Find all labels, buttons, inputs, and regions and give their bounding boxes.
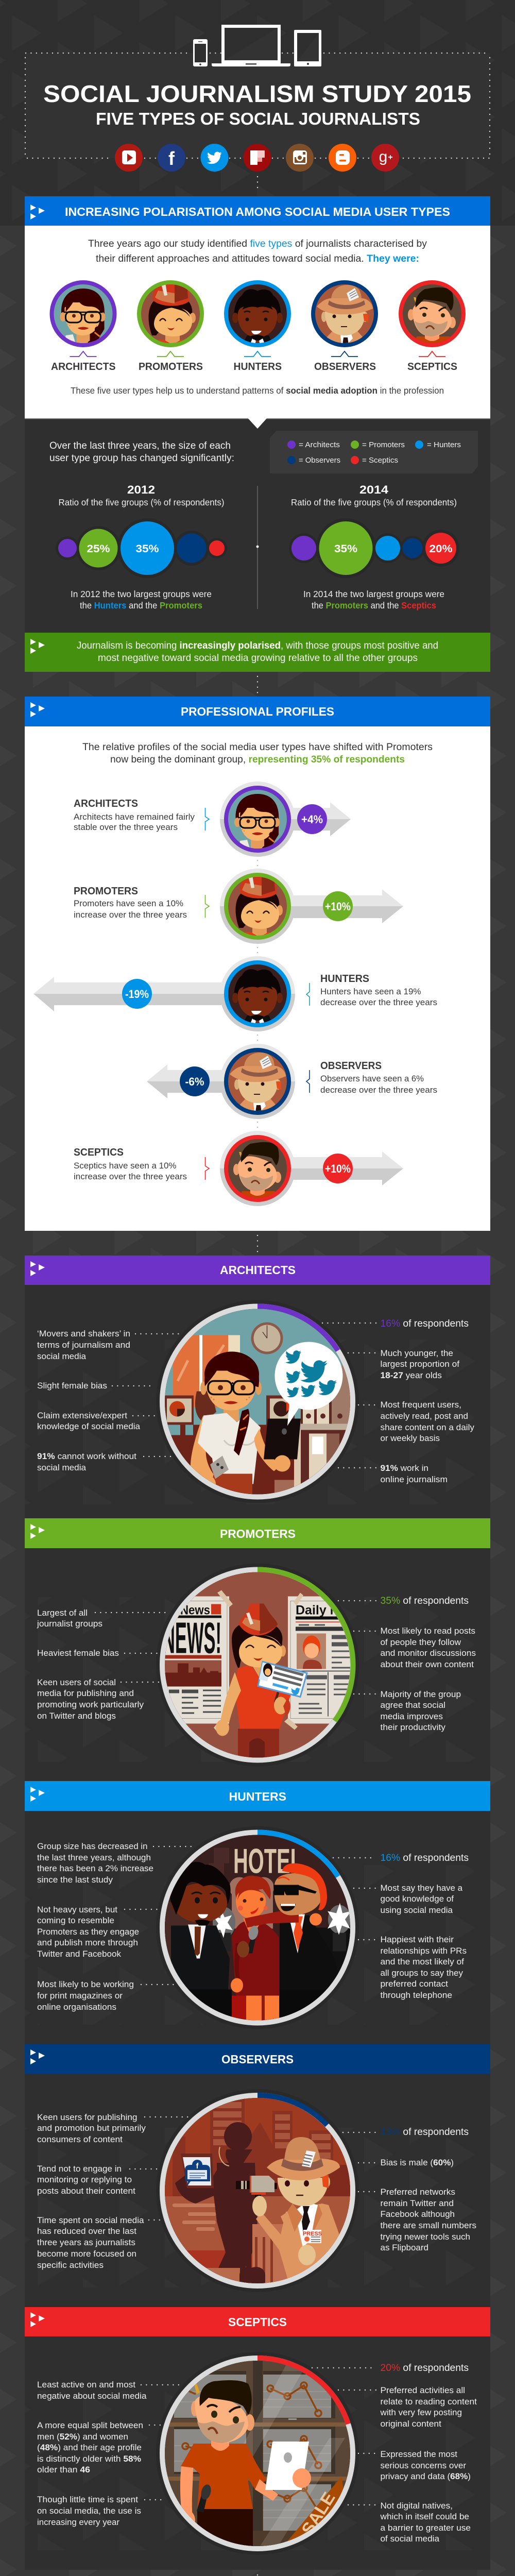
- portrait: sceptics: SCEPTICS: [407, 361, 457, 372]
- panel: five types: [25, 226, 490, 418]
- chart: 2014: 2014: [359, 483, 389, 496]
- profile: sceptics: increase over the three years: [74, 1172, 187, 1181]
- intro text: their different approaches and attitudes toward social media. They were:: [96, 253, 419, 264]
- profile: observers: decrease over the three years: [320, 1086, 437, 1095]
- right notes: [343, 2127, 476, 2252]
- left notes: Not heavy users, but: [37, 1905, 117, 1914]
- banner: ARCHITECTS: [220, 1263, 296, 1277]
- left notes: Promoters as they engage: [37, 1927, 139, 1937]
- header frame: [25, 53, 490, 158]
- right notes: Most likely to read posts: [380, 1626, 475, 1636]
- left notes: on social media, the use is: [37, 2506, 141, 2516]
- section: architects: [25, 1256, 490, 1503]
- profile: promoters: +10%: [325, 900, 351, 913]
- left notes: negative about social media: [37, 2392, 147, 2401]
- profile: promoters: Promoters have seen a 10%: [74, 899, 183, 908]
- left notes: ‘Movers and shakers’ in: [37, 1329, 130, 1338]
- left notes: Twitter and Facebook: [37, 1950, 122, 1959]
- portrait: observers: [311, 280, 378, 372]
- text: over three years: [49, 440, 234, 464]
- left notes: for print magazines or: [37, 1991, 123, 2001]
- left notes: the last three years, although: [37, 1853, 151, 1862]
- right notes: trying newer tools such: [380, 2232, 470, 2242]
- left notes: there has been a 2% increase: [37, 1864, 153, 1873]
- chart: 2014: the Promoters and the Sceptics: [312, 600, 436, 611]
- left notes: Most likely to be working: [37, 1980, 134, 1989]
- legend: = Architects: [299, 440, 340, 449]
- right notes: share content on a daily: [380, 1423, 475, 1432]
- profile: sceptics: Sceptics have seen a 10%: [74, 1161, 177, 1171]
- intro text: The relative profiles of the social media user types have shifted with Promoters: [82, 742, 433, 753]
- profile: observers: [147, 1044, 437, 1119]
- left notes: [37, 1329, 179, 1472]
- right notes: Most say they have a: [380, 1884, 463, 1893]
- left notes: [37, 1842, 196, 2012]
- profile: promoters: PROMOTERS: [74, 886, 138, 897]
- right notes: relationships with PRs: [380, 1946, 467, 1956]
- left notes: and promotion but primarily: [37, 2124, 146, 2133]
- chart: 2012: 25%: [87, 543, 110, 555]
- profile: hunters: HUNTERS: [320, 973, 369, 985]
- left notes: A more equal split between: [37, 2421, 143, 2430]
- right notes: [322, 1318, 475, 1484]
- portrait: architects: ARCHITECTS: [51, 361, 115, 372]
- left notes: increasing every year: [37, 2518, 120, 2527]
- profile: sceptics: [74, 1131, 403, 1206]
- illustration: architect with tablet and twitter birds: [156, 1300, 359, 1503]
- portrait: promoters: PROMOTERS: [139, 361, 203, 372]
- legend: = Promoters: [362, 440, 405, 449]
- left notes: Claim extensive/expert: [37, 1411, 127, 1420]
- right notes: Majority of the group: [380, 1690, 461, 1699]
- right notes: a barrier to greater use: [380, 2523, 471, 2533]
- left notes: 91% cannot work without: [37, 1452, 136, 1461]
- social media icons: f: [168, 148, 175, 169]
- callout: increasingly polarised: most negative toward social media growing relative to all the other groups: [98, 652, 418, 664]
- right notes: original content: [380, 2419, 441, 2429]
- left notes: promoting work particularly: [37, 1700, 144, 1709]
- panel: professional profiles: [25, 726, 490, 1231]
- right notes: Preferred networks: [380, 2188, 455, 2197]
- chart: 2014: [289, 483, 459, 611]
- section: hunters: [25, 1781, 490, 2029]
- right notes: preferred contact: [380, 1979, 448, 1989]
- portrait: hunters: HUNTERS: [234, 361, 282, 372]
- profile: architects: ARCHITECTS: [74, 798, 138, 809]
- profile: architects: Architects have remained fairly: [74, 812, 195, 822]
- profile: hunters: -19%: [125, 988, 149, 1001]
- portrait: hunters: [224, 280, 291, 372]
- right notes: Preferred activities all: [380, 2386, 465, 2395]
- panel: professional profiles banner: PROFESSIONAL PROFILES: [181, 705, 334, 718]
- left notes: on Twitter and blogs: [37, 1711, 116, 1721]
- left notes: media for publishing and: [37, 1689, 134, 1698]
- right notes: Happiest with their: [380, 1935, 454, 1944]
- chart: 2012: 2012: [127, 483, 155, 496]
- text: over three years: Over the last three years, the size of each: [49, 440, 231, 451]
- legend: = Observers: [299, 456, 340, 465]
- right notes: actively read, post and: [380, 1412, 468, 1421]
- chart: 2012: [56, 483, 227, 611]
- left notes: social media: [37, 1463, 87, 1472]
- callout: increasingly polarised: [25, 633, 490, 672]
- right notes: remain Twitter and: [380, 2199, 454, 2208]
- chart: 2014: In 2014 the two largest groups were: [303, 589, 444, 599]
- right notes: with very few posting: [380, 2408, 462, 2417]
- illustration: promoter with newspapers: NEWS!: [162, 1614, 221, 1663]
- left notes: monitoring or replying to: [37, 2175, 132, 2184]
- right notes: 35% of respondents: [380, 1596, 469, 1606]
- banner: SCEPTICS: [228, 2315, 287, 2329]
- section: sceptics: [25, 2307, 490, 2555]
- illustration: hunters at hotel: [156, 1826, 359, 2029]
- right notes: relate to reading content: [380, 2397, 477, 2406]
- intro text: Three years ago our study identified five types of journalists characterised by: [88, 239, 427, 249]
- left notes: has reduced over the last: [37, 2227, 136, 2236]
- legend: = Sceptics: [362, 456, 398, 465]
- left notes: journalist groups: [37, 1619, 102, 1629]
- illustration: promoter with newspapers: Daily News: [296, 1603, 364, 1618]
- illustration: hunters at hotel: HOTEL: [233, 1841, 303, 1880]
- illustration: observer with camera: [156, 2089, 359, 2292]
- profile: observers: -6%: [185, 1075, 204, 1088]
- right notes: Not digital natives,: [380, 2501, 453, 2511]
- left notes: Group size has decreased in: [37, 1842, 147, 1851]
- banner: [25, 1518, 490, 1548]
- right notes: and the most likely of: [380, 1957, 464, 1967]
- profile: architects: [74, 782, 351, 857]
- title: SOCIAL JOURNALISM STUDY 2015: [43, 80, 471, 107]
- chart: 2014: Ratio of the five groups (% of respondents): [291, 497, 457, 507]
- right notes: online journalism: [380, 1475, 448, 1484]
- left notes: Keen users of social: [37, 1678, 116, 1687]
- right notes: Facebook although: [380, 2210, 455, 2219]
- left notes: [37, 2113, 188, 2270]
- portrait: architects: [49, 280, 116, 372]
- portrait: sceptics: [399, 280, 466, 372]
- adoption sentence: These five user types help us to understand patterns of social media adoption in the profession: [71, 385, 444, 396]
- section: promoters: [25, 1518, 490, 1766]
- left notes: social media: [37, 1352, 87, 1361]
- left notes: men (52%) and women: [37, 2432, 128, 2442]
- right notes: agree that social: [380, 1701, 445, 1710]
- portrait: promoters: [137, 280, 204, 372]
- profile: sceptics: +10%: [325, 1162, 351, 1175]
- legend: = Hunters: [427, 440, 461, 449]
- left notes: Tend not to engage in: [37, 2164, 122, 2174]
- left notes: older than 46: [37, 2465, 90, 2475]
- chart: 2012: In 2012 the two largest groups were: [71, 589, 212, 599]
- right notes: 16% of respondents: [380, 1318, 469, 1329]
- intro text: [82, 742, 433, 765]
- banner: PROMOTERS: [220, 1527, 296, 1540]
- portrait: observers: OBSERVERS: [314, 361, 376, 372]
- left notes: Time spent on social media: [37, 2216, 144, 2225]
- illustration: promoter with newspapers: [156, 1563, 364, 1766]
- right notes: of people they follow: [380, 1638, 461, 1647]
- left notes: Heaviest female bias: [37, 1649, 119, 1658]
- left notes: become more focused on: [37, 2249, 136, 2259]
- right notes: serious concerns over: [380, 2461, 467, 2470]
- right notes: and monitor discussions: [380, 1649, 476, 1658]
- right notes: 16% of respondents: [380, 1853, 469, 1863]
- right notes: Expressed the most: [380, 2450, 457, 2459]
- profile: observers: Observers have seen a 6%: [320, 1074, 424, 1083]
- left notes: knowledge of social media: [37, 1422, 141, 1431]
- left notes: is distinctly older with 58%: [37, 2454, 141, 2464]
- chart: 2014: 35%: [334, 543, 357, 555]
- social media icons: +: [388, 153, 393, 162]
- profile: promoters: increase over the three years: [74, 910, 187, 920]
- banner: [25, 2307, 490, 2336]
- right notes: privacy and data ( 68%): [380, 2472, 471, 2481]
- left notes: consumers of content: [37, 2135, 123, 2144]
- left notes: Keen users for publishing: [37, 2113, 137, 2122]
- left notes: Largest of all: [37, 1608, 88, 1618]
- legend: [270, 431, 478, 473]
- panel: increasing polarisation banner: INCREASING POLARISATION AMONG SOCIAL MEDIA USER TYPES: [65, 205, 450, 218]
- right notes: Bias is male (60%): [380, 2158, 454, 2167]
- left notes: Slight female bias: [37, 1381, 107, 1391]
- illustration: promoter with newspapers: News: [180, 1603, 210, 1618]
- icon: devices: [193, 25, 321, 66]
- right notes: good knowledge of: [380, 1894, 454, 1904]
- left notes: since the last study: [37, 1875, 113, 1885]
- right notes: 13% of respondents: [380, 2127, 469, 2138]
- chart: 2014: 20%: [430, 543, 453, 555]
- right notes: their productivity: [380, 1723, 446, 1732]
- section: observers: [25, 2044, 490, 2292]
- right notes: Much younger, the: [380, 1349, 453, 1358]
- profile: architects: stable over the three years: [74, 823, 178, 832]
- right notes: 18-27 year olds: [380, 1371, 442, 1380]
- banner: [25, 2044, 490, 2074]
- illustration: observer with camera: f: [196, 2162, 199, 2171]
- panel: increasing polarisation banner: [25, 196, 490, 226]
- profile: observers: OBSERVERS: [320, 1060, 382, 1072]
- profile: sceptics: SCEPTICS: [74, 1147, 124, 1158]
- profile: hunters: [33, 956, 437, 1031]
- right notes: 91% work in: [380, 1464, 428, 1473]
- intro text: now being the dominant group, representing 35% of respondents: [110, 754, 405, 765]
- left notes: online organisations: [37, 2003, 116, 2012]
- right notes: largest proportion of: [380, 1360, 459, 1369]
- illustration: observer with camera: PRESS: [303, 2231, 322, 2237]
- banner: [25, 1256, 490, 1285]
- banner: HUNTERS: [229, 1790, 286, 1803]
- illustration: sceptic at shop window: [156, 2352, 359, 2555]
- right notes: 20% of respondents: [380, 2363, 469, 2374]
- right notes: which in itself could be: [380, 2512, 469, 2521]
- left notes: [37, 1608, 169, 1721]
- left notes: [37, 2380, 184, 2527]
- text: over three years: user type group has changed significantly:: [49, 453, 234, 464]
- social media icons: [115, 144, 399, 172]
- left notes: terms of journalism and: [37, 1341, 130, 1350]
- banner: OBSERVERS: [221, 2053, 294, 2066]
- left notes: Though little time is spent: [37, 2495, 138, 2504]
- right notes: using social media: [380, 1906, 453, 1915]
- panel: user type details: [25, 1285, 490, 2570]
- left notes: and publish more through: [37, 1938, 138, 1947]
- profile: promoters: [74, 869, 403, 944]
- profile: architects: +4%: [301, 813, 323, 826]
- illustration: sceptic at shop window: SALE: [298, 2489, 339, 2539]
- left notes: coming to resemble: [37, 1916, 114, 1925]
- callout: increasingly polarised: Journalism is becoming increasingly polarised, with those groups most positive and: [77, 640, 438, 651]
- right notes: or weekly basis: [380, 1434, 440, 1443]
- left notes: specific activities: [37, 2261, 104, 2270]
- right notes: [333, 1853, 469, 2000]
- profile: hunters: decrease over the three years: [320, 998, 437, 1007]
- banner: [25, 1781, 490, 1811]
- right notes: about their own content: [380, 1660, 474, 1669]
- social media icons: g: [379, 148, 387, 165]
- right notes: of social media: [380, 2534, 440, 2544]
- chart: 2012: 35%: [136, 543, 159, 555]
- left notes: posts about their content: [37, 2187, 135, 2196]
- right notes: Most frequent users,: [380, 1400, 461, 1410]
- profile: hunters: Hunters have seen a 19%: [320, 987, 421, 996]
- left notes: Least active on and most: [37, 2380, 135, 2389]
- subtitle: FIVE TYPES OF SOCIAL JOURNALISTS: [96, 109, 420, 128]
- panel: professional profiles banner: [25, 697, 490, 726]
- right notes: as Flipboard: [380, 2243, 428, 2252]
- right notes: [312, 2363, 477, 2544]
- left notes: three years as journalists: [37, 2238, 135, 2247]
- right notes: [338, 1596, 476, 1732]
- left notes: (48%) and their age profile: [37, 2443, 142, 2452]
- chart: 2012: Ratio of the five groups (% of respondents): [59, 497, 225, 507]
- right notes: through telephone: [380, 1991, 452, 2000]
- chart: 2012: the Hunters and the Promoters: [80, 600, 202, 611]
- right notes: all groups to say they: [380, 1969, 464, 1978]
- right notes: media improves: [380, 1712, 443, 1721]
- intro text: [88, 239, 427, 264]
- right notes: there are small numbers: [380, 2221, 476, 2230]
- panel: group size change: [25, 418, 490, 633]
